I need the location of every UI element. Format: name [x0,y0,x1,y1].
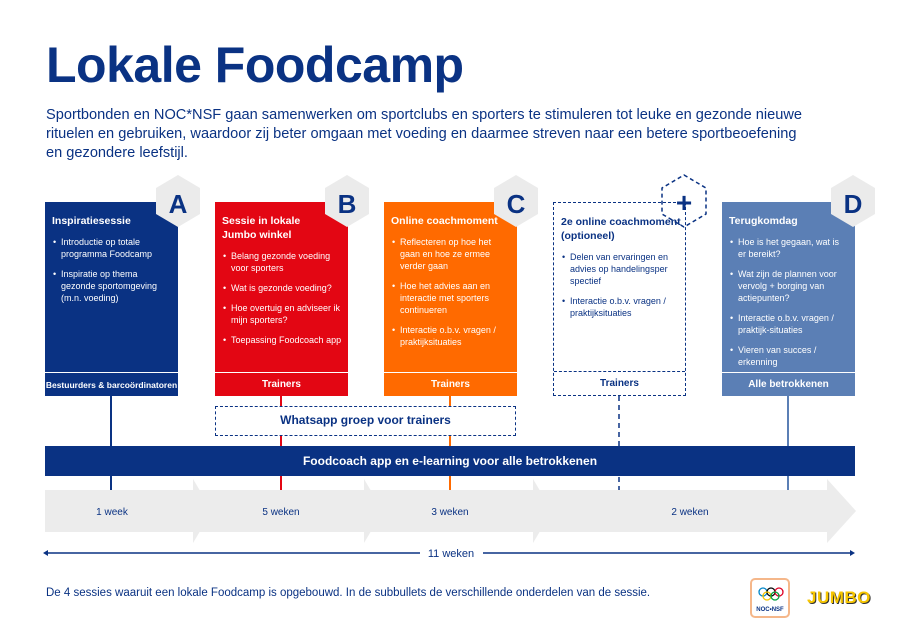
panel C: Interactie o.b.v. vragen / praktijksituaties [400,325,496,347]
badge B: B [338,189,356,219]
panel + optional: 2e online coachmoment (optioneel) [561,216,681,242]
badge D [831,175,875,227]
panel C: Trainers [431,379,470,390]
intro text [46,107,802,161]
badge C [494,175,538,227]
panel D: Hoe is het gegaan, wat is er bereikt? [738,237,839,259]
logo NOC*NSF [750,578,790,618]
week labels: 1 week [96,507,129,518]
panel A: Inspiratiesessie [52,215,131,227]
panel B [215,202,348,396]
badge B [325,175,369,227]
panel C: Online coachmoment [391,215,498,227]
panel B: Trainers [262,379,301,390]
panel A: Bestuurders & barcoördinatoren [46,380,177,390]
panel D: Alle betrokkenen [748,379,829,390]
footer note: De 4 sessies waaruit een lokale Foodcamp is opgebouwd. In de subbullets de verschillende onderdelen van de sessie. [46,587,650,599]
badge A: A [169,189,188,219]
panel B: Wat is gezonde voeding? [231,283,332,293]
panel + optional: Interactie o.b.v. vragen / praktijksituaties [570,296,666,318]
whatsapp box [215,406,516,436]
badge A [156,175,200,227]
panel + optional: Trainers [600,378,639,389]
week labels: 3 weken [431,507,469,518]
panel A: Introductie op totale programma Foodcamp [61,237,152,259]
logos [750,578,871,618]
panel B: Toepassing Foodcoach app [231,335,341,345]
logo NOC*NSF: NOC•NSF [756,607,784,613]
intro text: Sportbonden en NOC*NSF gaan samenwerken om sportclubs en sporters te stimuleren tot leuke en gezonde nieuwe rituelen en gebruiken, waardoor zij beter omgaan met voeding en daarmee streven naar een betere sportbeoefening [46,107,802,142]
badge C: C [507,189,526,219]
foodcoach bar: Foodcoach app en e-learning voor alle betrokkenen [303,454,597,468]
11 weeks span [43,548,855,560]
intro text: en gezondere leefstijl. [46,145,188,161]
panel D: Wat zijn de plannen voor vervolg + borging van actiepunten? [738,269,837,303]
panel A: Inspiratie op thema gezonde sportomgeving (m.n. voeding) [61,269,157,303]
timeline arrows [45,479,856,543]
logo Jumbo: JUMBO [807,588,871,607]
panel B: Belang gezonde voeding voor sporters [231,251,330,273]
panel A [45,202,178,396]
foodcoach bar [45,446,855,476]
panel + optional [553,202,686,396]
panel D: Vieren van succes / erkenning [738,345,816,367]
week labels: 5 weken [262,507,300,518]
week labels [96,507,709,518]
panel C: Hoe het advies aan en interactie met sporters continueren [400,281,490,315]
panel C [384,202,517,396]
week labels: 2 weken [671,507,709,518]
panel D: Terugkomdag [729,215,798,227]
11 weeks span: 11 weken [428,548,474,560]
badge +: + [676,187,692,218]
badge + [662,175,706,227]
panel B: Hoe overtuig en adviseer ik mijn sporters? [231,303,340,325]
whatsapp box: Whatsapp groep voor trainers [280,413,451,427]
panel C: Reflecteren op hoe het gaan en hoe ze ermee verder gaan [400,237,491,271]
title: Lokale Foodcamp [46,37,464,93]
panel B: Sessie in lokale Jumbo winkel [222,215,300,241]
panel D [722,202,855,396]
hexagon badges [156,174,875,228]
badge D: D [844,189,862,219]
panel + optional: Delen van ervaringen en advies op handelingsper spectief [570,252,668,286]
panel D: Interactie o.b.v. vragen / praktijk-situaties [738,313,834,335]
